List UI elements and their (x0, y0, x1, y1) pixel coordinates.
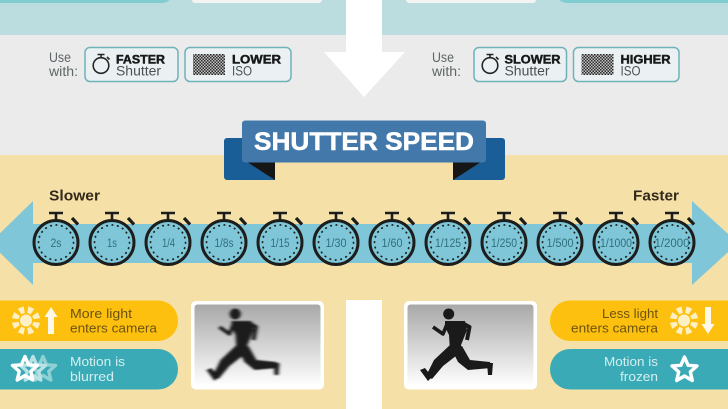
stopwatch: 1/250: 1/250 (491, 238, 517, 250)
photo: blurred runner (191, 301, 324, 390)
text: more light: More light (70, 306, 132, 321)
badge: slower shutter (474, 48, 566, 82)
icon: arrow up (44, 307, 58, 334)
stopwatch: 1/250 (482, 213, 526, 264)
text: less light: enters camera (571, 320, 659, 336)
icon: blurred stars (12, 356, 56, 380)
arrow: double-headed speed scale (0, 201, 728, 285)
badge: slower shutter: SLOWER (504, 52, 561, 66)
stopwatch: 1/2000 (650, 213, 694, 264)
stopwatch: 1/500 (538, 213, 582, 264)
pill: less light (550, 300, 728, 341)
arrow: white down arrow (324, 0, 405, 97)
label: slower: Slower (49, 188, 100, 204)
icon: sun small (670, 306, 698, 335)
panel: upper grey band (0, 35, 728, 155)
text: more light: enters camera (70, 320, 158, 336)
icon: star (672, 357, 697, 380)
badge: faster shutter: FASTER (116, 52, 165, 66)
text: motion frozen: frozen (620, 369, 658, 384)
use with: right group (431, 48, 679, 82)
stopwatch: 2s (34, 213, 78, 264)
badge: lower iso: ISO (232, 64, 252, 78)
banner: shutter speed (224, 120, 505, 181)
stopwatch: 1/60 (370, 213, 414, 264)
stopwatch: 1/2000: 1/2000 (654, 238, 690, 250)
stopwatch: 1/125 (426, 213, 470, 264)
panel: shutter speed cream area (0, 155, 728, 409)
stopwatch: 1/4: 1/4 (162, 238, 175, 250)
stopwatch: 1/60: 1/60 (382, 238, 402, 250)
stopwatch: 1/4 (146, 213, 190, 264)
text: less light: Less light (602, 306, 658, 321)
stopwatch: 1s (90, 213, 134, 264)
panel: top right teal (382, 0, 728, 35)
stopwatch: 1s: 1s (107, 238, 117, 250)
stopwatch: 1/125: 1/125 (435, 238, 461, 250)
badge: slower shutter: Shutter (504, 64, 550, 78)
icon: sun (12, 306, 40, 335)
photo: frozen runner (404, 301, 537, 390)
badge: higher iso (574, 48, 679, 82)
text: use with right: Use (432, 50, 454, 65)
pill: motion blurred (0, 349, 178, 390)
stopwatch row (34, 213, 694, 264)
panel: top left teal (0, 0, 346, 35)
pill: more light (0, 300, 178, 341)
stopwatch: 1/15: 1/15 (270, 238, 290, 250)
badge: lower iso (185, 48, 291, 82)
badge: higher iso: ISO (620, 64, 640, 78)
stopwatch: 1/8s: 1/8s (214, 238, 234, 250)
text: motion frozen: Motion is (604, 354, 659, 369)
stopwatch: 1/30: 1/30 (326, 238, 346, 250)
stopwatch: 1/8s (202, 213, 246, 264)
pill: motion frozen (550, 349, 728, 390)
badge: faster shutter (85, 48, 178, 82)
label: faster: Faster (633, 188, 679, 204)
stopwatch: 1/1000: 1/1000 (600, 238, 632, 250)
use with: left group (48, 48, 291, 82)
text: use with left: with: (48, 64, 78, 79)
text: motion blurred: Motion is (70, 354, 126, 369)
text: motion blurred: blurred (70, 369, 114, 384)
badge: higher iso: HIGHER (620, 52, 671, 66)
badge: lower iso: LOWER (232, 52, 281, 66)
stopwatch: 1/500: 1/500 (546, 238, 574, 250)
stopwatch: 1/1000 (594, 213, 638, 264)
icon: arrow down (702, 307, 714, 334)
heading: shutter speed: SHUTTER SPEED (254, 128, 474, 156)
text: use with left: Use (49, 50, 71, 65)
text: use with right: with: (431, 64, 461, 79)
stopwatch: 1/30 (314, 213, 358, 264)
stopwatch: 2s: 2s (50, 238, 62, 250)
stopwatch: 1/15 (258, 213, 302, 264)
badge: faster shutter: Shutter (116, 64, 162, 78)
